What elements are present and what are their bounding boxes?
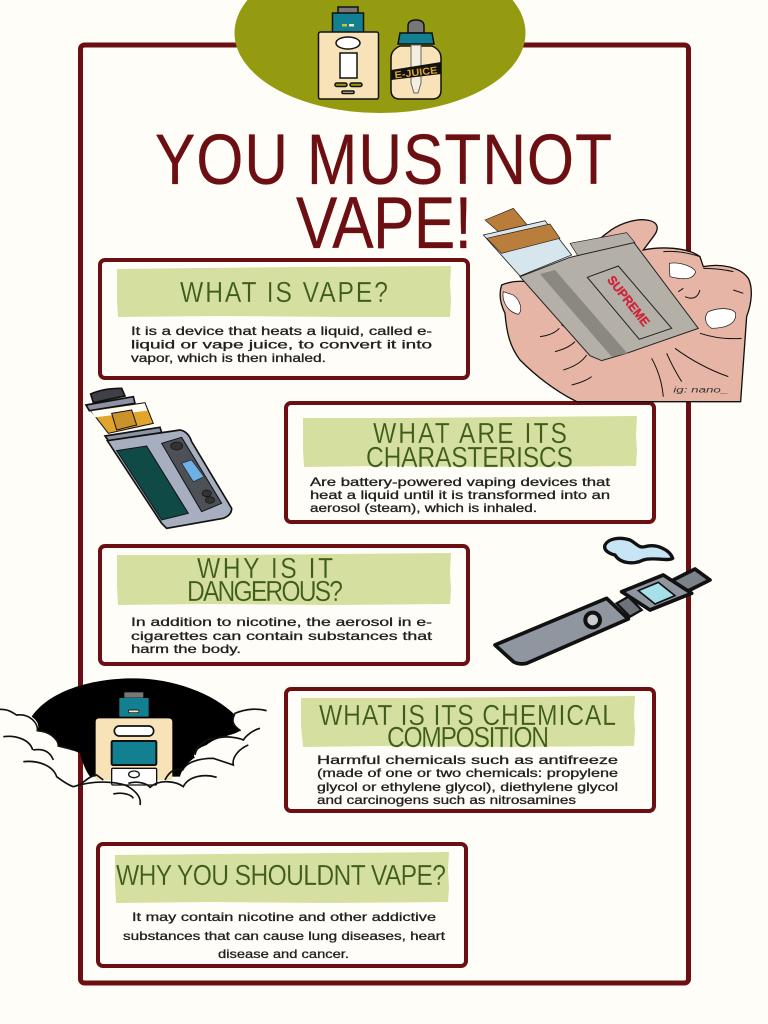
heading: why you shouldnt vape: WHY YOU SHOULDNT VAPE? [116, 859, 446, 891]
text block: shouldnt vape: substances that can cause lung diseases, heart [123, 929, 446, 943]
heading: why is it dangerous: WHY IS IT [197, 552, 333, 584]
text block: what is vape [131, 324, 432, 365]
text block: characteristics: Are battery-powered vaping devices that [310, 475, 611, 489]
text block: dangerous: cigarettes can contain substances that [131, 629, 433, 643]
text block: characteristics: heat a liquid until it is transformed into an [310, 488, 610, 502]
panel: what are its characteristics [286, 403, 654, 522]
text block: dangerous [131, 615, 433, 656]
text block: characteristics [310, 475, 611, 515]
heading: chemical composition: COMPOSITION [387, 721, 549, 753]
icon: hand holding supreme vape: ig: nano_ [673, 386, 728, 395]
title [155, 119, 612, 264]
text block: shouldnt vape: It may contain nicotine and other addictive [132, 910, 436, 924]
text block: what is vape: vapor, which is then inhaled. [131, 351, 326, 365]
icon: vape mod and e-juice bottle: E-JUICE [394, 65, 438, 81]
text block: chemical composition: and carcinogens such as nitrosamines [317, 793, 576, 807]
title: VAPE! [296, 183, 472, 264]
heading: why is it dangerous: DANGEROUS? [187, 575, 343, 607]
text block: shouldnt vape [123, 910, 446, 961]
panel: why you shouldnt vape [98, 844, 466, 966]
text block: characteristics: aerosol (steam), which is inhaled. [310, 501, 537, 515]
panel: chemical composition [286, 689, 654, 811]
heading: what is vape: WHAT IS VAPE? [180, 276, 388, 308]
title: YOU MUSTNOT [155, 119, 612, 199]
text block: chemical composition: (made of one or two chemicals: propylene [317, 766, 618, 780]
panel: why is it dangerous [100, 546, 468, 664]
panel: what is vape [100, 260, 468, 378]
heading: why is it dangerous [187, 552, 343, 607]
heading: chemical composition [319, 699, 616, 753]
icon: box mod vape [86, 388, 232, 528]
icon: vape mod with smoke cloud [0, 678, 267, 805]
text block: chemical composition: glycol or ethylene glycol), diethylene glycol [317, 780, 618, 794]
header green ellipse [234, 0, 526, 113]
icon: vape pen with vapor [495, 538, 710, 664]
text block: chemical composition: Harmful chemicals such as antifreeze [317, 753, 618, 767]
icon: vape mod and e-juice bottle [318, 7, 441, 99]
icon: hand holding supreme vape: SUPREME [604, 273, 652, 329]
text block: what is vape: liquid or vape juice, to convert it into [131, 338, 432, 352]
heading: what are its charasteriscs [366, 417, 573, 473]
outer frame [80, 45, 688, 983]
heading: what are its charasteriscs: WHAT ARE ITS [373, 417, 567, 449]
text block: what is vape: It is a device that heats a liquid, called e- [131, 324, 432, 338]
text block: dangerous: harm the body. [131, 642, 241, 656]
text block: dangerous: In addition to nicotine, the aerosol in e- [131, 615, 432, 629]
text block: shouldnt vape: disease and cancer. [218, 947, 349, 961]
icon: hand holding supreme vape [483, 208, 751, 402]
heading: chemical composition: WHAT IS ITS CHEMICAL [319, 699, 616, 731]
heading: what are its charasteriscs: CHARASTERISCS [366, 441, 573, 473]
text block: chemical composition [317, 753, 618, 807]
